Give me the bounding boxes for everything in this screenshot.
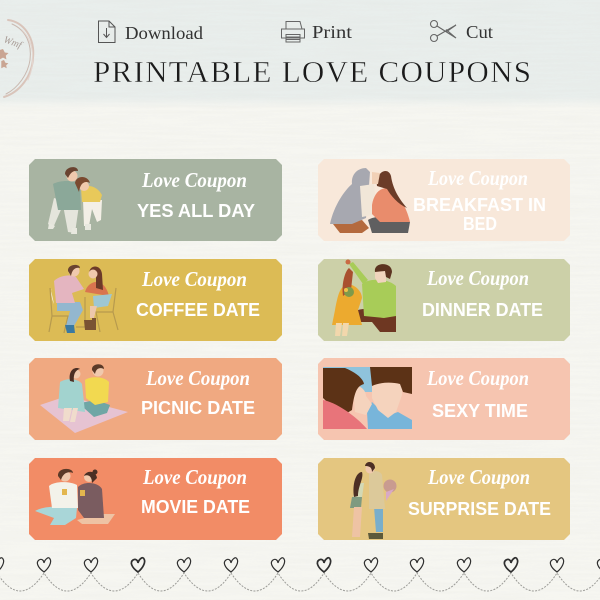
label: coupon name line 2: BED	[463, 214, 497, 234]
illustration: couple with flowers	[332, 260, 396, 336]
label: love coupon script: Love Coupon	[427, 465, 530, 489]
label: love coupon script: Love Coupon	[427, 166, 528, 190]
label: coupon name: MOVIE DATE	[141, 497, 250, 517]
label: love coupon script: Love Coupon	[141, 168, 247, 192]
background: header band	[0, 0, 600, 108]
coupon: surprise date	[318, 458, 570, 540]
icon: printer	[282, 22, 304, 42]
label: Print: Print	[312, 22, 352, 42]
illustration: couple with mugs	[35, 469, 115, 525]
label: love coupon script: Love Coupon	[145, 366, 250, 390]
label: Download: Download	[125, 23, 203, 43]
icon: download	[98, 21, 115, 42]
logo: brush ring: Wmf	[2, 34, 24, 52]
label: love coupon script: Love Coupon	[426, 266, 529, 290]
title: PRINTABLE LOVE COUPONS	[93, 54, 531, 89]
border: dashed scallops	[0, 573, 600, 591]
label: coupon name: YES ALL DAY	[137, 201, 255, 221]
coupon: dinner date	[318, 259, 570, 341]
label: coupon name: PICNIC DATE	[141, 398, 255, 418]
coupon: yes all day	[29, 159, 282, 241]
illustration: couple on picnic blanket	[40, 364, 128, 433]
label: coupon name: COFFEE DATE	[136, 300, 260, 320]
label: coupon name line 1: BREAKFAST IN	[413, 195, 546, 215]
coupon: picnic date	[29, 358, 282, 440]
label: coupon name: SEXY TIME	[432, 401, 528, 421]
label: love coupon script: Love Coupon	[426, 366, 529, 390]
logo: brush ring	[0, 20, 33, 97]
illustration: couple kissing in hoodie	[330, 168, 410, 233]
label: coupon name: DINNER DATE	[422, 300, 543, 320]
label: Cut: Cut	[466, 22, 493, 42]
icon: scissors	[430, 20, 456, 42]
label: love coupon script: Love Coupon	[142, 465, 247, 489]
coupon: sexy time	[318, 358, 570, 440]
illustration: couple at cafe table	[49, 265, 118, 333]
illustration: couple sitting	[48, 167, 102, 234]
illustration: close-up kissing couple	[323, 367, 412, 429]
border: hearts	[0, 558, 600, 572]
coupon: movie date	[29, 458, 282, 540]
illustration: couple with bouquet	[350, 462, 396, 539]
label: coupon name: SURPRISE DATE	[408, 499, 551, 519]
coupon: coffee date	[29, 259, 282, 341]
label: love coupon script: Love Coupon	[141, 267, 247, 291]
coupon: breakfast in bed	[318, 159, 570, 241]
